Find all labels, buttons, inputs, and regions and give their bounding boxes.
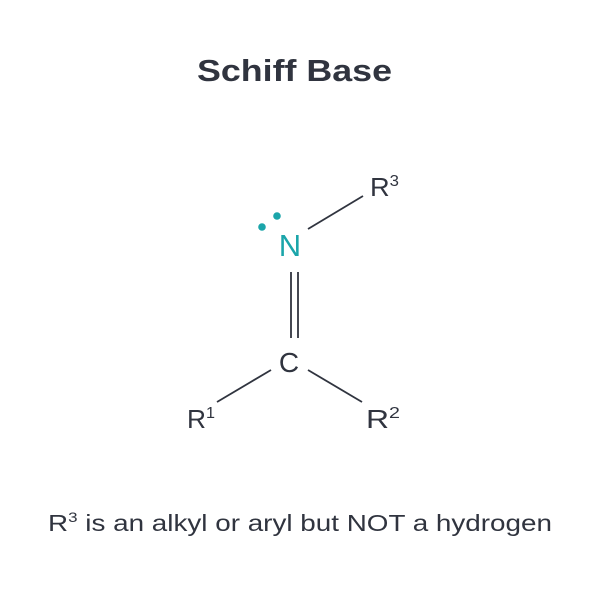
atom: C: C [279,347,299,378]
footnote text: is an alkyl or aryl but NOT a hydrogen [78,510,552,536]
label R3: R [370,172,389,202]
bond C-R2 [308,370,362,402]
label R2: R [366,404,385,434]
molecule: Schiff base structure [187,172,400,434]
bond N-R3 [308,196,363,229]
lone pair dots [258,212,281,231]
title: Schiff Base [197,53,392,88]
label R3: 3 [390,173,399,190]
footnote text: 3 [68,509,78,525]
label R1: R [187,404,206,434]
double bond [291,272,298,338]
label R1: 1 [206,405,215,422]
label R2: 2 [389,405,400,422]
atom: N: N [279,228,301,263]
bond C-R1 [217,370,271,402]
footnote text: R [48,510,65,536]
